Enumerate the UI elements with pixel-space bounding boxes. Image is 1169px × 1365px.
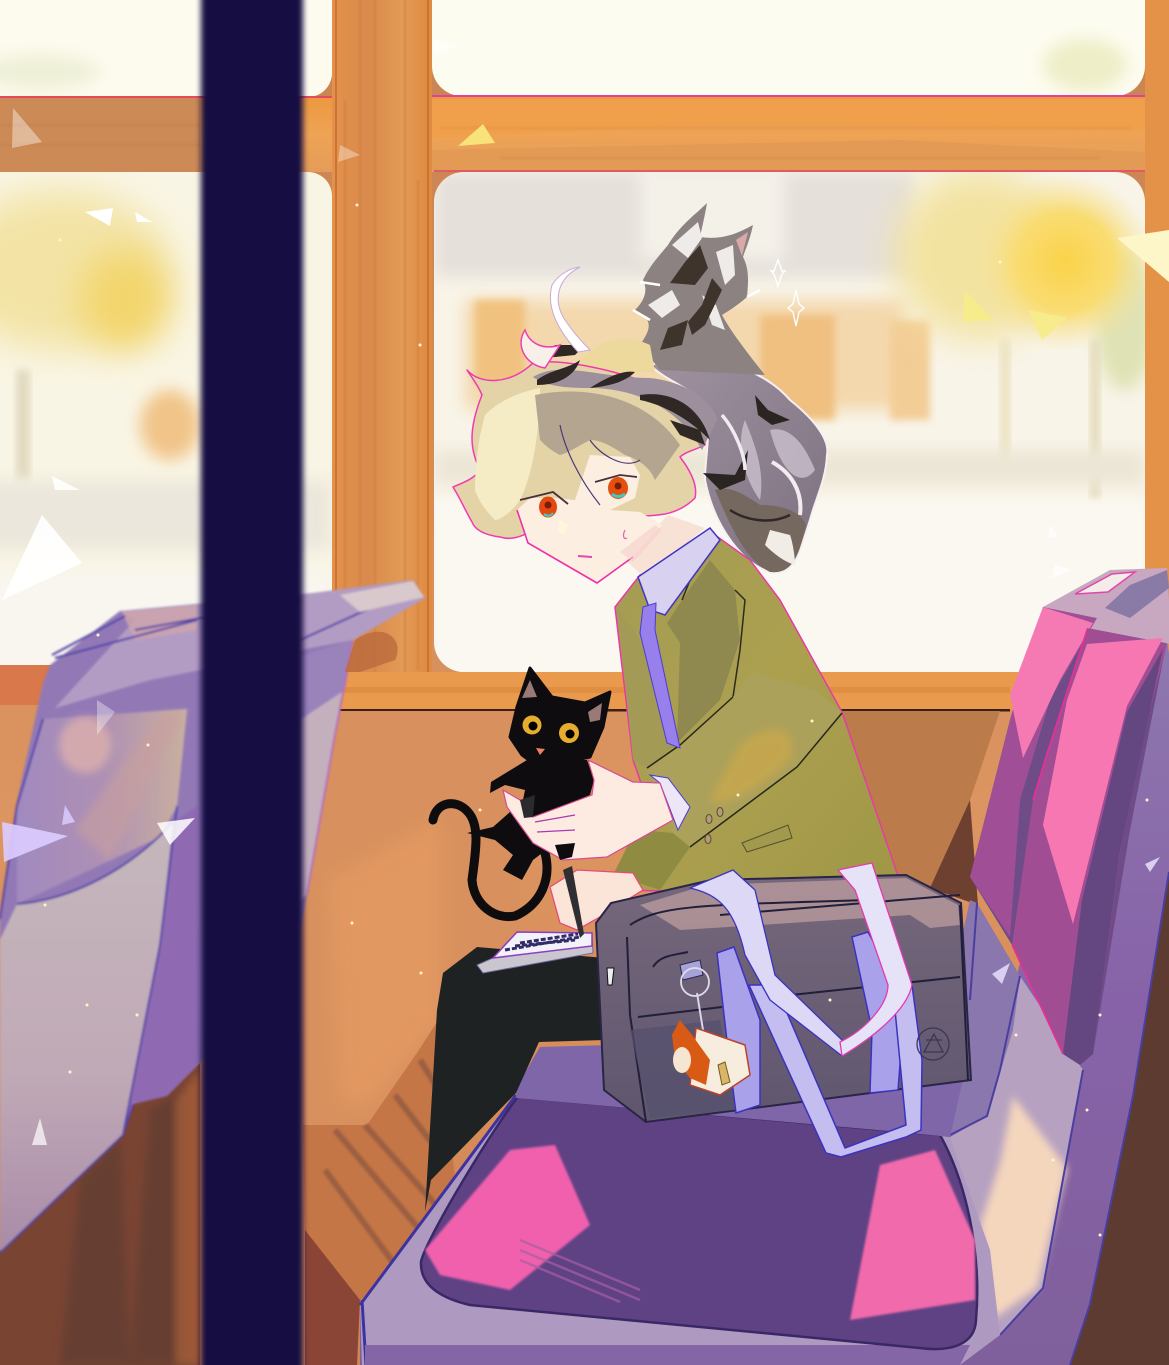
dust specks bbox=[44, 204, 1148, 1236]
right seat bbox=[360, 568, 1169, 1365]
mouth bbox=[578, 556, 592, 557]
seat: shell outer edge bbox=[1070, 872, 1169, 1365]
left seat back, blurred foreground bbox=[0, 580, 425, 1253]
bag: shadow bbox=[630, 1020, 735, 1118]
notebook bbox=[477, 932, 593, 973]
seat: light inner panel bbox=[950, 976, 1083, 1335]
seat base and cushion bbox=[360, 1095, 1000, 1365]
hair base bbox=[453, 362, 705, 538]
face outline bbox=[517, 510, 633, 583]
cat: head bbox=[510, 668, 610, 768]
cat: body bbox=[490, 760, 594, 817]
jacket buttons bbox=[705, 808, 723, 844]
cushion bbox=[421, 1097, 977, 1349]
pants bbox=[425, 947, 605, 1212]
bag: left strap tab bbox=[717, 947, 760, 1113]
bag: body bbox=[596, 875, 971, 1122]
floor beyond seat bbox=[1060, 860, 1169, 1365]
seat: front headrest bbox=[1012, 628, 1167, 1065]
bag: keychain bbox=[672, 960, 750, 1095]
window frame bbox=[0, 0, 1169, 712]
jacket pocket bbox=[742, 825, 792, 852]
school bag bbox=[596, 863, 971, 1157]
seat: glass panel bbox=[17, 709, 187, 904]
seat: lower panel bbox=[0, 822, 173, 1253]
seat: panel beyond pole bbox=[300, 640, 353, 900]
hair: grey crown bbox=[533, 370, 717, 450]
hair: white tuft bbox=[550, 267, 590, 352]
cat-shaped hair tuft bbox=[633, 203, 765, 375]
lower left floor shadow bbox=[0, 1063, 200, 1365]
cheek shadow bbox=[620, 525, 662, 562]
seat: handle bbox=[1043, 568, 1169, 644]
hair: side tuft bbox=[521, 330, 560, 368]
cat: ears inner bbox=[522, 680, 602, 722]
seat: rear headrest bbox=[970, 607, 1097, 937]
bag: left handle bbox=[690, 870, 842, 1056]
seat: headrest backing bbox=[970, 607, 1167, 1054]
wall lower shading bbox=[305, 711, 1000, 1125]
student bbox=[425, 203, 897, 1212]
hair: dark strands bbox=[537, 345, 710, 445]
bag: top highlight bbox=[640, 878, 960, 930]
bag: seams bbox=[627, 895, 968, 1122]
cat: tail bbox=[433, 804, 547, 917]
cat: body lower bbox=[467, 812, 550, 880]
face bbox=[517, 455, 662, 583]
neck bbox=[625, 515, 705, 578]
window pane: top left bbox=[0, 0, 332, 97]
window pane: top right bbox=[432, 0, 1145, 96]
right eye bbox=[595, 475, 637, 499]
shirt collar bbox=[638, 528, 720, 615]
writing hand bbox=[550, 870, 643, 930]
black cat bbox=[433, 668, 610, 917]
outlined sparkles bbox=[771, 260, 804, 326]
ponytail bbox=[650, 359, 827, 573]
keychain: orange cat bbox=[672, 1020, 710, 1085]
head bbox=[453, 267, 717, 583]
seat: warm highlight bbox=[980, 1096, 1067, 1319]
shirt cuff bbox=[650, 775, 690, 830]
hair: pale left locks bbox=[475, 388, 540, 520]
necktie bbox=[640, 603, 680, 748]
bag: right strap tab bbox=[852, 932, 905, 1093]
nose highlight bbox=[558, 520, 568, 535]
window pane: centre with blurred street bbox=[434, 165, 1155, 680]
seat: outer shell bbox=[360, 640, 1169, 1365]
bag: zip pull bbox=[607, 968, 614, 985]
seat block behind bag bbox=[516, 1045, 965, 1137]
jacket bbox=[610, 530, 897, 895]
hair: taupe crown bbox=[535, 392, 680, 480]
bag: lower strap loop bbox=[749, 985, 922, 1157]
left eye bbox=[520, 492, 568, 518]
cat: nose bbox=[536, 748, 545, 755]
bag: emblem bbox=[917, 1028, 949, 1060]
fingers and cat paw bbox=[520, 795, 575, 860]
cat: eyes bbox=[522, 716, 579, 743]
sweat drop bbox=[624, 530, 627, 539]
bag: right handle bbox=[838, 863, 912, 1056]
seat: top lip bbox=[55, 580, 425, 708]
jacket sleeve bbox=[647, 672, 842, 847]
window pane: left with blurred tree bbox=[0, 172, 332, 680]
hair: blond crown bump bbox=[575, 339, 655, 372]
pencil bbox=[563, 866, 584, 938]
hand holding cat bbox=[503, 760, 673, 860]
seat shadow on sill bbox=[345, 632, 398, 672]
foreground dark pole bbox=[201, 0, 303, 1365]
floor stripes bbox=[303, 1022, 460, 1365]
keychain: noodle cup bbox=[690, 1028, 750, 1095]
seat: lavender wing bbox=[920, 900, 1020, 1135]
lower jacket bbox=[613, 830, 690, 890]
